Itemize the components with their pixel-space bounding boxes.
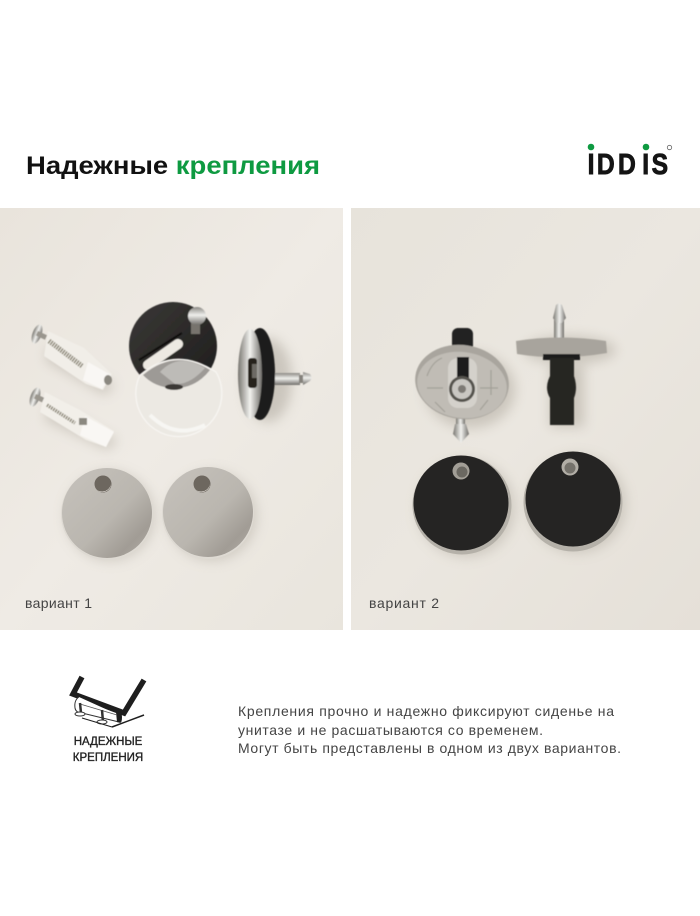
- icon caption: НАДЕЖНЫЕ: [74, 736, 143, 748]
- icon caption: КРЕПЛЕНИЯ: [73, 752, 143, 764]
- side-view disc with chrome pin: [238, 328, 312, 420]
- black disc with pin: [128, 301, 218, 376]
- shadows: [45, 338, 292, 561]
- description text: Крепления прочно и надежно фиксируют сиденье на: [238, 703, 614, 719]
- grey disc side view with pin and black post: [516, 304, 607, 425]
- logo: iddis: IDDIS: [588, 148, 668, 180]
- brushed cover plate 2: [162, 467, 254, 559]
- transparent film disc: [136, 359, 222, 437]
- black cover plate 1: [412, 456, 512, 554]
- label: variant 1: вариант 1: [25, 595, 92, 611]
- shadows: [417, 336, 626, 557]
- black cover plate 2: [524, 452, 622, 552]
- anchor bolt 1: [29, 323, 112, 390]
- title: Надежные крепления: [26, 152, 320, 180]
- grey disc front view with screw: [410, 328, 514, 443]
- panel: variant 2 photo: [351, 208, 700, 630]
- icon: reliable fastening: [73, 677, 144, 727]
- brushed cover plate 1: [61, 468, 153, 560]
- label: variant 2: вариант 2: [369, 595, 439, 611]
- description text: Могут быть представлены в одном из двух вариантов.: [238, 740, 621, 756]
- description text: унитазе и не расшатываются со временем.: [238, 722, 543, 738]
- description text: [238, 703, 621, 756]
- panel: variant 1 photo: [0, 208, 343, 630]
- anchor bolt 2: [27, 386, 114, 447]
